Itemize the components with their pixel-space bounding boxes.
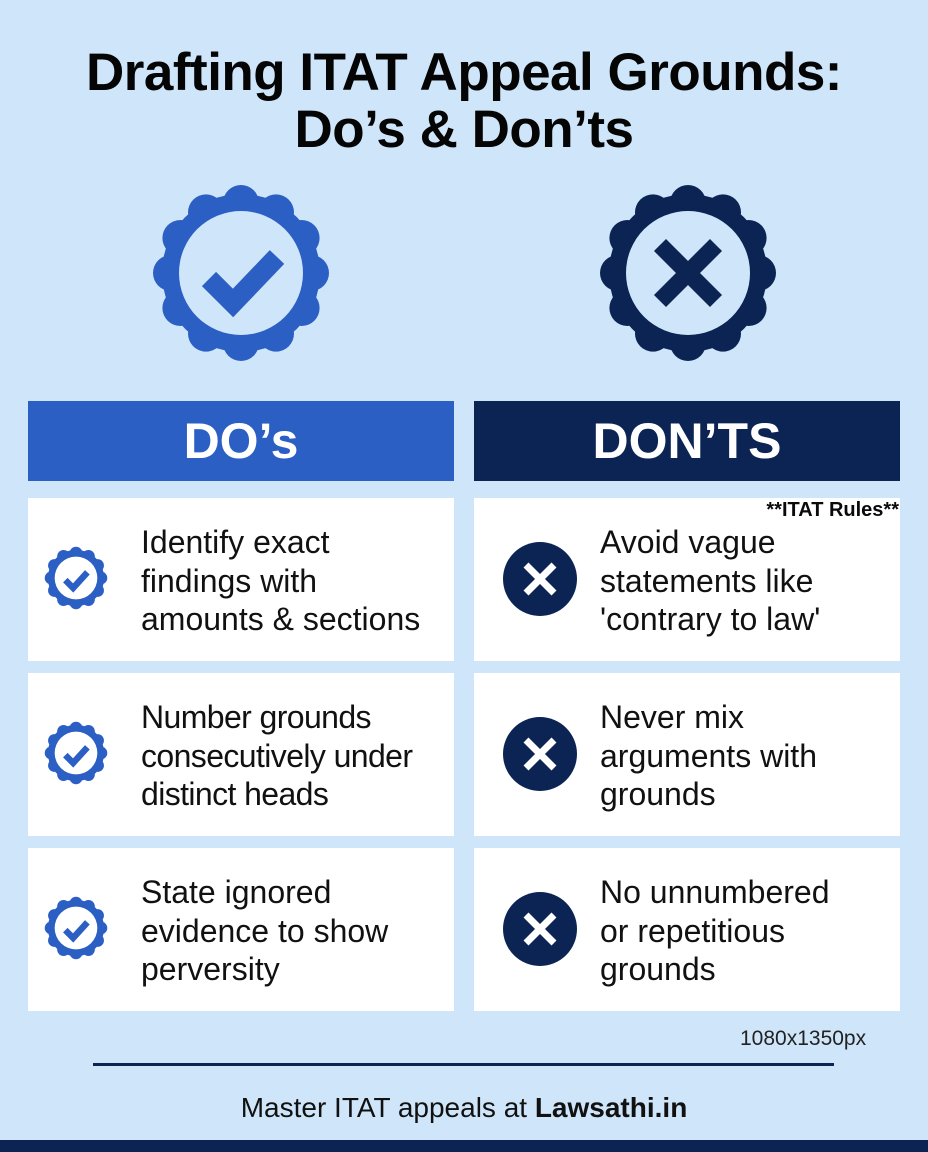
- card: do 2: consecutively under: [141, 738, 412, 774]
- card: do 1: [28, 498, 454, 661]
- header: DO's: DO’s: [184, 413, 298, 469]
- header: DON'TS: [474, 401, 900, 481]
- size note: 1080x1350px: [740, 1027, 866, 1050]
- card: do 3: State ignored: [141, 874, 331, 910]
- card: do 1: amounts & sections: [141, 601, 420, 637]
- card: dont 2: [474, 673, 900, 836]
- card: do 1: findings with: [141, 562, 317, 598]
- icon: check badge: [153, 185, 329, 361]
- card: dont 3: grounds: [600, 951, 716, 987]
- card: do 3: evidence to show: [141, 912, 388, 948]
- card: do 3: [28, 848, 454, 1011]
- header: DO's: [28, 401, 454, 481]
- card: do 2: [28, 673, 454, 836]
- icon: cross badge: [600, 185, 776, 361]
- card: dont 1: 'contrary to law': [600, 601, 820, 637]
- label: ITAT Rules: **ITAT Rules**: [766, 499, 899, 521]
- card: dont 2: Never mix: [600, 699, 744, 735]
- card: dont 1: statements like: [600, 562, 813, 598]
- card: dont 2: arguments with: [600, 738, 817, 774]
- card: dont 3: or repetitious: [600, 912, 785, 948]
- card: do 3: perversity: [141, 951, 280, 987]
- card: do 2: Number grounds: [141, 699, 371, 735]
- card: do 2: distinct heads: [141, 776, 328, 812]
- title: [86, 43, 842, 159]
- card: dont 1: Avoid vague: [600, 524, 776, 560]
- card: dont 1: [474, 498, 900, 661]
- title: Drafting ITAT Appeal Grounds:: [86, 43, 842, 102]
- title: Do’s & Don’ts: [294, 100, 633, 159]
- card: dont 3: [474, 848, 900, 1011]
- card: dont 3: No unnumbered: [600, 874, 829, 910]
- header: DON'TS: DON’TS: [593, 413, 781, 469]
- footer text: Master ITAT appeals at Lawsathi.in: [241, 1092, 687, 1123]
- card: do 1: Identify exact: [141, 524, 330, 560]
- card: dont 2: grounds: [600, 776, 716, 812]
